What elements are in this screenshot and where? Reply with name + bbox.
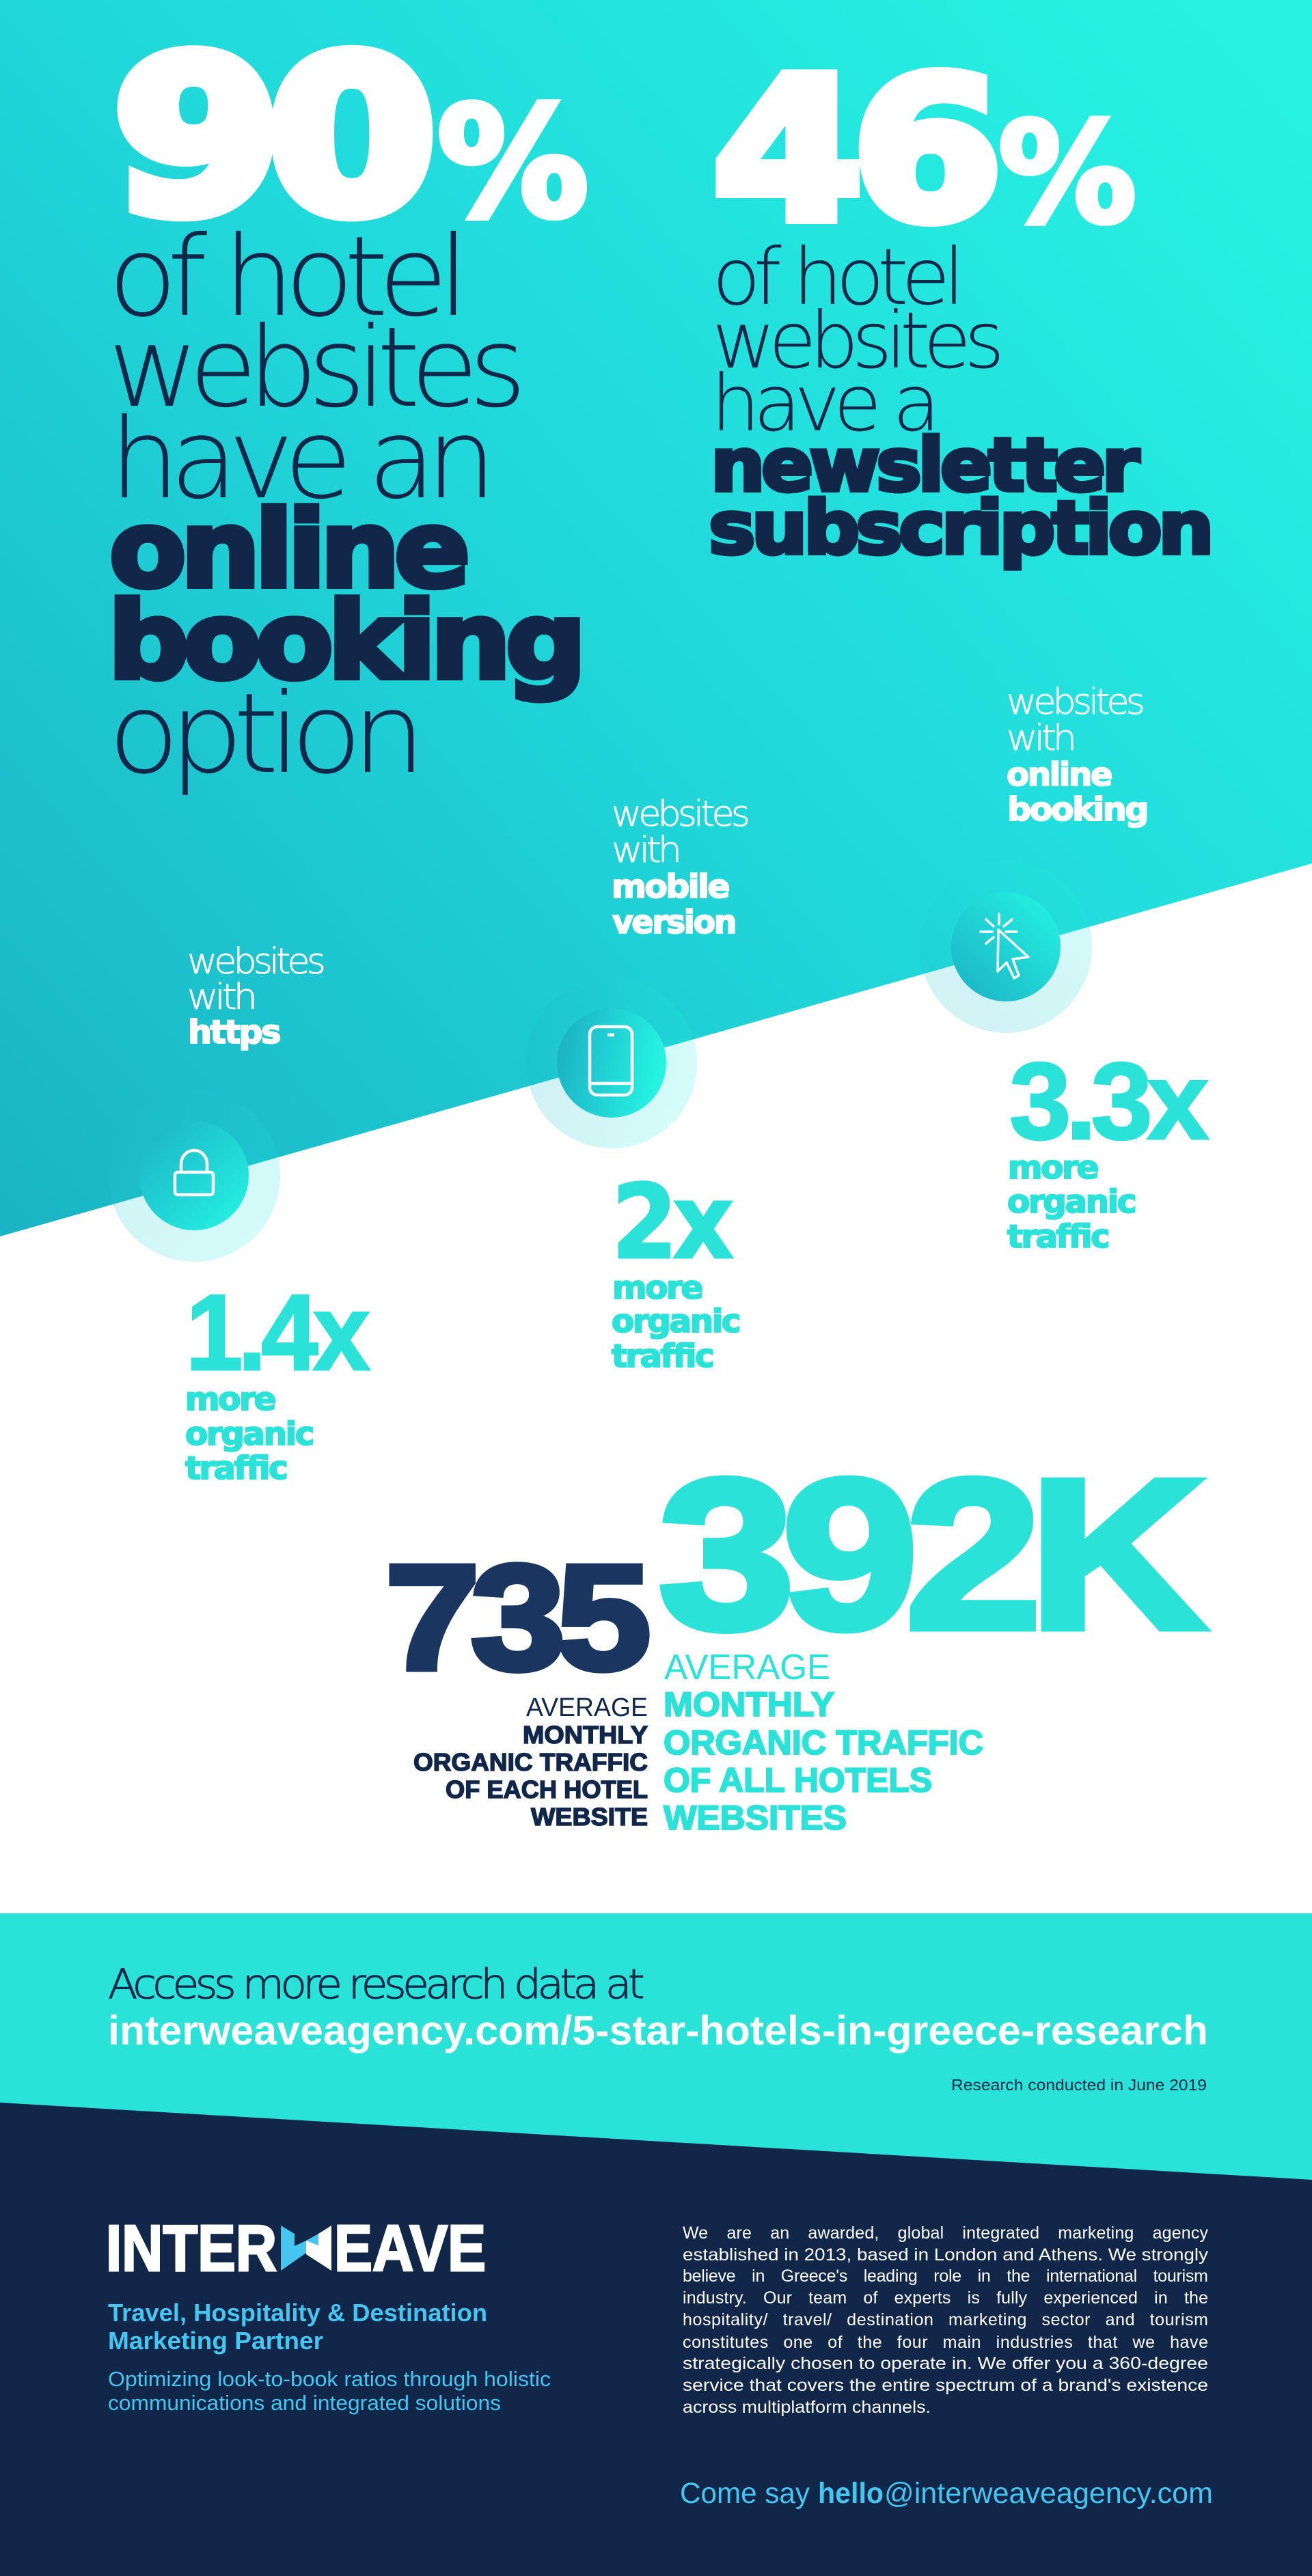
description text: have an: [109, 396, 487, 524]
stat: 46% newsletter subscription: [709, 38, 1210, 571]
big number 46%: [713, 38, 1132, 264]
value: organic: [1007, 1183, 1135, 1220]
label: [1007, 682, 1147, 829]
column: https: [108, 941, 370, 1486]
about paragraph: industry. Our team of experts is fully experienced in the: [683, 2288, 1208, 2308]
caption: ORGANIC TRAFFIC: [664, 1723, 983, 1762]
panel: gradient hero background: [0, 0, 1312, 1236]
value: more: [612, 1269, 702, 1306]
description text: option: [108, 670, 415, 799]
description text: of hotel: [108, 213, 459, 342]
label: websites: [612, 794, 748, 835]
about paragraph: [683, 2224, 1209, 2417]
value: organic: [185, 1415, 313, 1452]
tagline: Marketing Partner: [108, 2327, 323, 2355]
caption: WEBSITE: [531, 1803, 648, 1831]
description text: booking: [108, 579, 581, 703]
description text: newsletter: [711, 424, 1140, 508]
label: [187, 941, 324, 1051]
stat: 735 average monthly organic traffic: [385, 1535, 648, 1831]
number: 735: [385, 1535, 646, 1701]
description text: online: [109, 488, 465, 611]
value: more: [1008, 1149, 1097, 1186]
big number 90%: %: [437, 75, 584, 251]
description text: websites: [108, 304, 519, 432]
label: with: [187, 977, 254, 1018]
caption: AVERAGE: [526, 1693, 648, 1722]
column: online booking: [920, 682, 1208, 1255]
label: with: [612, 830, 679, 871]
description: communications and integrated solutions: [108, 2391, 501, 2415]
contact line: Come say: [680, 2477, 810, 2510]
panel: research call to action band: [0, 1913, 1312, 2187]
label: mobile: [612, 868, 728, 906]
description text: subscription: [709, 486, 1210, 571]
contact line: hello: [818, 2477, 884, 2510]
caption: MONTHLY: [523, 1721, 648, 1749]
value: [185, 1273, 370, 1486]
value: 3.3x: [1009, 1040, 1208, 1162]
icon: lock in circle: [108, 1090, 280, 1262]
label: websites: [1007, 682, 1143, 723]
tagline: Travel, Hospitality & Destination: [108, 2299, 487, 2327]
value: [612, 1163, 739, 1374]
icon: cursor click in circle: [920, 861, 1092, 1033]
logo: Interweave: INTER: [106, 2212, 277, 2285]
panel: footer: [0, 2103, 1312, 2576]
big number 90%: [114, 14, 584, 261]
label: online: [1007, 756, 1111, 794]
caption: ORGANIC TRAFFIC: [413, 1748, 648, 1776]
value: [1007, 1040, 1208, 1255]
value: 1.4x: [186, 1273, 370, 1393]
value: more: [185, 1381, 275, 1417]
description text: [108, 213, 581, 799]
about paragraph: constitutes one of the four main industries that we have: [683, 2333, 1208, 2352]
icon: phone in circle: [526, 978, 697, 1148]
value: 2x: [612, 1163, 733, 1282]
number: 392K: [659, 1436, 1205, 1674]
caption: OF EACH HOTEL: [446, 1775, 648, 1803]
label: booking: [1007, 791, 1147, 829]
logo: Interweave: [106, 2212, 486, 2285]
about paragraph: believe in Greece's leading role in the international tourism: [683, 2267, 1208, 2286]
about paragraph: We are an awarded, global integrated marketing agency: [683, 2224, 1208, 2243]
label: with: [1007, 718, 1074, 759]
about paragraph: hospitality/ travel/ destination marketing sector and tourism: [683, 2310, 1208, 2329]
heading: Access more research data at: [108, 1961, 643, 2008]
value: traffic: [612, 1338, 713, 1374]
value: organic: [612, 1303, 739, 1340]
caption: WEBSITES: [664, 1799, 847, 1837]
caption: AVERAGE: [664, 1648, 830, 1687]
big number 46%: %: [998, 93, 1132, 254]
description text: have a: [711, 358, 933, 449]
caption: [664, 1648, 983, 1837]
about paragraph: service that covers the entire spectrum of a brand's existence: [683, 2376, 1208, 2395]
label: version: [612, 904, 735, 941]
caption: [413, 1693, 648, 1831]
about paragraph: strategically chosen to operate in. We offer you a 360-degree: [683, 2354, 1208, 2373]
research note: Research conducted in June 2019: [951, 2076, 1207, 2094]
about paragraph: across multiplatform channels.: [683, 2398, 931, 2417]
description: [108, 2367, 551, 2415]
big number 90%: 90: [114, 14, 426, 261]
big number 46%: 46: [713, 38, 994, 264]
label: https: [188, 1014, 279, 1051]
about paragraph: established in 2013, based in London and Athens. We strongly: [683, 2245, 1209, 2265]
column: mobile version: [526, 794, 748, 1374]
label: [612, 794, 748, 941]
description text: [709, 232, 1210, 571]
description text: of hotel: [712, 232, 958, 322]
value: traffic: [1007, 1218, 1108, 1255]
contact line: [680, 2477, 1213, 2510]
description: Optimizing look-to-book ratios through holistic: [108, 2367, 551, 2391]
logo: Interweave: EAVE: [334, 2212, 486, 2285]
stat: 90% online booking: [108, 14, 584, 799]
tagline: [108, 2299, 487, 2355]
link: interweaveagency.com/5-star-hotels-in-greece-research: [108, 2008, 1208, 2053]
contact line: @interweaveagency.com: [884, 2477, 1213, 2510]
value: traffic: [185, 1450, 286, 1486]
description text: websites: [712, 295, 1000, 386]
stat: 392K average monthly organic traffic: [659, 1436, 1205, 1837]
caption: OF ALL HOTELS: [664, 1761, 932, 1799]
label: websites: [187, 941, 324, 982]
caption: MONTHLY: [664, 1685, 834, 1723]
